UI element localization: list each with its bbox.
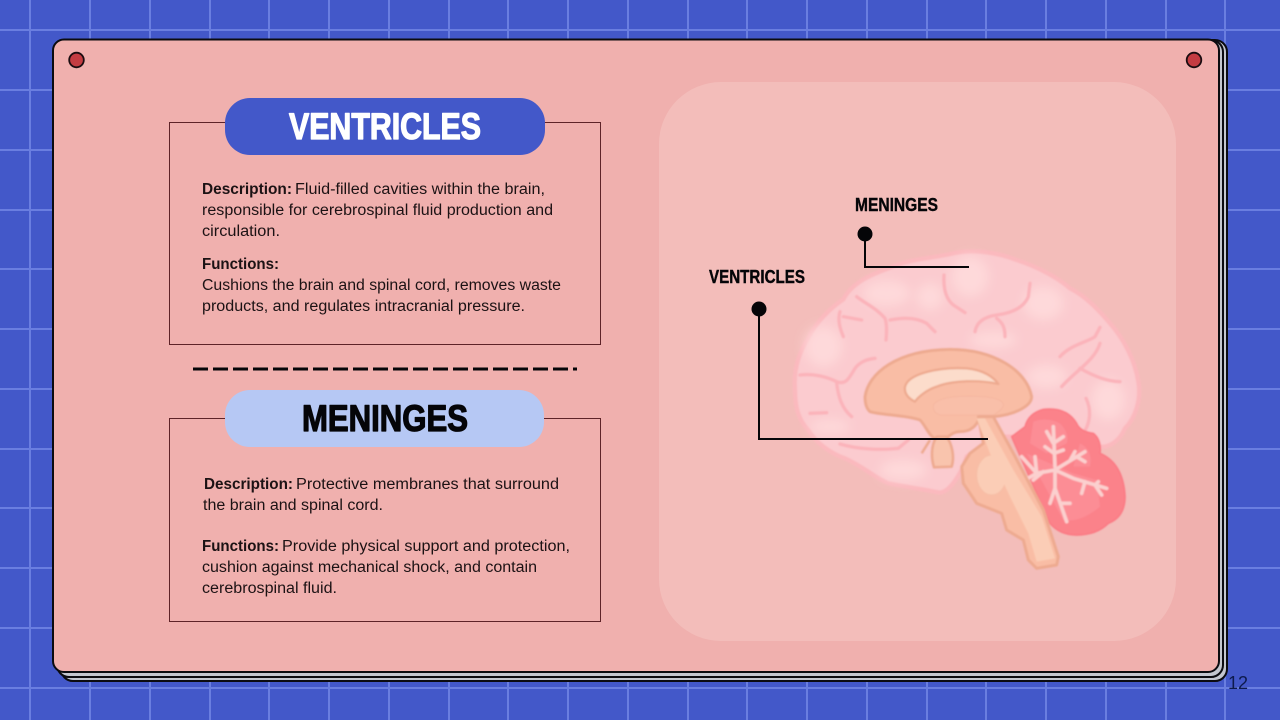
panel: meninges [170,390,600,622]
meninges description text: Protective membranes that surround [296,476,559,493]
meninges functions text [202,538,570,597]
panel: ventricles [170,98,600,344]
gyri highlights [805,257,1125,480]
ventricles description text: responsible for cerebrospinal fluid production and [202,202,553,219]
meninges functions text: Functions: [202,538,279,555]
ventricles heading pill: VENTRICLES [289,106,481,147]
meninges description text: Description: [204,476,293,493]
thalamus outline [933,396,1003,415]
meninges functions text: cerebrospinal fluid. [202,580,337,597]
ventricles heading pill [225,98,545,155]
corpus callosum and diencephalon [865,349,1032,467]
ventricles description text: Fluid-filled cavities within the brain, [295,181,545,198]
cerebellum [1012,409,1125,535]
ventricles description text: circulation. [202,223,280,240]
meninges heading pill [225,390,544,447]
label: meninges callout [855,195,969,267]
meninges description text: the brain and spinal cord. [203,497,383,514]
illustration: brain cross-section [795,251,1139,568]
cerebrum [795,251,1139,493]
spinal tract highlight [977,418,1055,562]
brainstem and spinal cord [962,417,1058,568]
pituitary [922,437,953,467]
label: meninges callout: MENINGES [855,195,938,215]
ventricles description text: Description: [202,181,292,198]
arbor vitae [1022,427,1107,522]
ventricles functions text: Cushions the brain and spinal cord, removes waste [202,277,561,294]
pin: top left [69,53,84,67]
ventricles description text [202,181,553,240]
ventricles functions text: Functions: [202,256,279,273]
meninges box frame [170,418,600,622]
meninges description text [203,476,559,514]
label: ventricles callout: VENTRICLES [709,267,805,287]
label: ventricles callout [709,267,988,439]
ventricles functions text [202,256,561,315]
meninges functions text: cushion against mechanical shock, and contain [202,559,537,576]
page number: 12 [1228,673,1248,693]
ventricles box frame [170,122,600,344]
dashed separator [193,368,577,370]
meninges heading pill: MENINGES [302,398,468,439]
pin: top right [1187,53,1201,67]
ventricles functions text: products, and regulates intracranial pressure. [202,298,525,315]
panel: brain diagram background [659,82,1176,641]
meninges functions text: Provide physical support and protection, [282,538,570,555]
ventricle cavity [905,368,998,402]
sulci [800,275,1120,449]
